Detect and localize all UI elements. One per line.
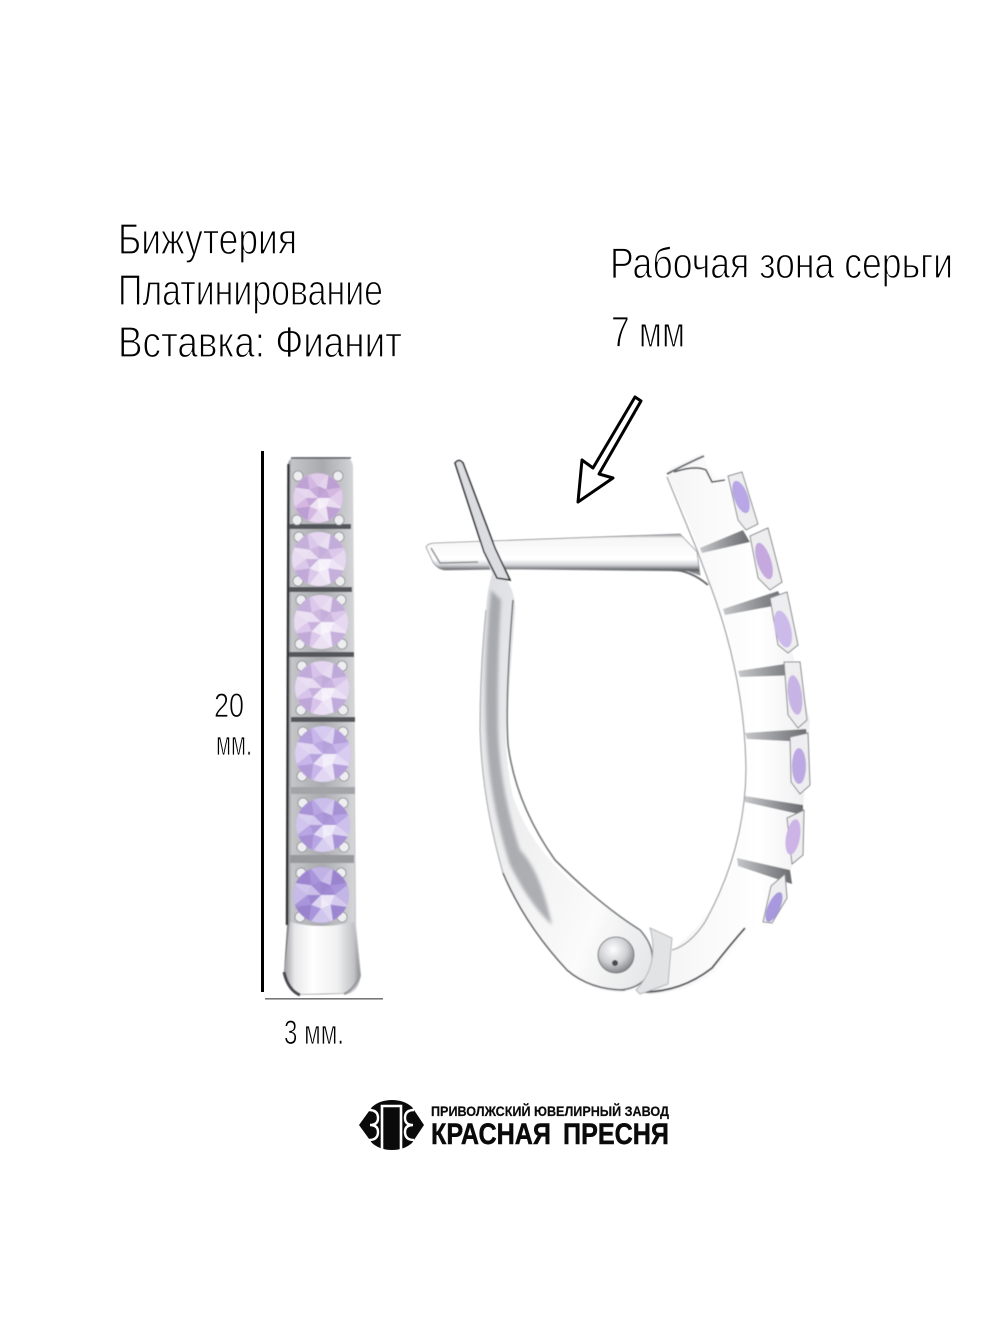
separators bbox=[289, 524, 355, 863]
dimension: height line bbox=[261, 451, 264, 992]
back band bbox=[640, 453, 810, 994]
stone 1 bbox=[292, 471, 344, 525]
text: insert: Вставка: Фианит bbox=[118, 318, 402, 367]
crossbar flare bbox=[672, 570, 708, 585]
text: width label: 3 мм. bbox=[284, 1014, 344, 1052]
text: category: Бижутерия bbox=[118, 215, 297, 264]
rivet bbox=[598, 937, 634, 973]
logo bbox=[359, 1100, 669, 1151]
lever shaded stripe bbox=[486, 590, 552, 925]
stone 4 bbox=[293, 659, 351, 717]
logo emblem bbox=[359, 1100, 424, 1150]
front strip body bbox=[284, 457, 361, 995]
lever outer rim bbox=[480, 610, 503, 873]
lever inner edge bbox=[507, 600, 652, 990]
side stones bbox=[729, 479, 806, 924]
logo tagline: ПРИВОЛЖСКИЙ ЮВЕЛИРНЫЙ ЗАВОД bbox=[431, 1102, 669, 1119]
text block: product specifications bbox=[118, 215, 402, 367]
logo name: КРАСНАЯ ПРЕСНЯ bbox=[431, 1118, 669, 1151]
stone 3 bbox=[292, 593, 350, 651]
side prongs bbox=[700, 530, 808, 884]
strip lower cap bbox=[284, 922, 360, 994]
stone 5 bbox=[293, 724, 353, 784]
text: height label bbox=[214, 687, 252, 763]
text block: working zone bbox=[610, 239, 953, 357]
text: plating: Платинирование bbox=[118, 266, 383, 315]
lever outer edge bbox=[503, 873, 625, 990]
earring side view bbox=[426, 453, 810, 994]
text: height label: мм. bbox=[216, 725, 252, 763]
stone 2 bbox=[290, 530, 348, 588]
side stone settings bbox=[728, 472, 810, 923]
text: working zone value: 7 мм bbox=[611, 308, 685, 357]
text: height label: 20 bbox=[214, 687, 244, 725]
stone 7 bbox=[291, 865, 351, 925]
hinge bbox=[636, 928, 672, 994]
earring front view bbox=[284, 457, 361, 995]
dimension: width line bbox=[265, 998, 383, 1000]
lever arm bbox=[480, 548, 652, 992]
crossbar end loop bbox=[431, 548, 478, 563]
crossbar bbox=[426, 534, 700, 575]
stone 6 bbox=[294, 796, 352, 854]
arrow: points to working zone bbox=[578, 397, 641, 502]
lever pin top bbox=[455, 460, 510, 580]
